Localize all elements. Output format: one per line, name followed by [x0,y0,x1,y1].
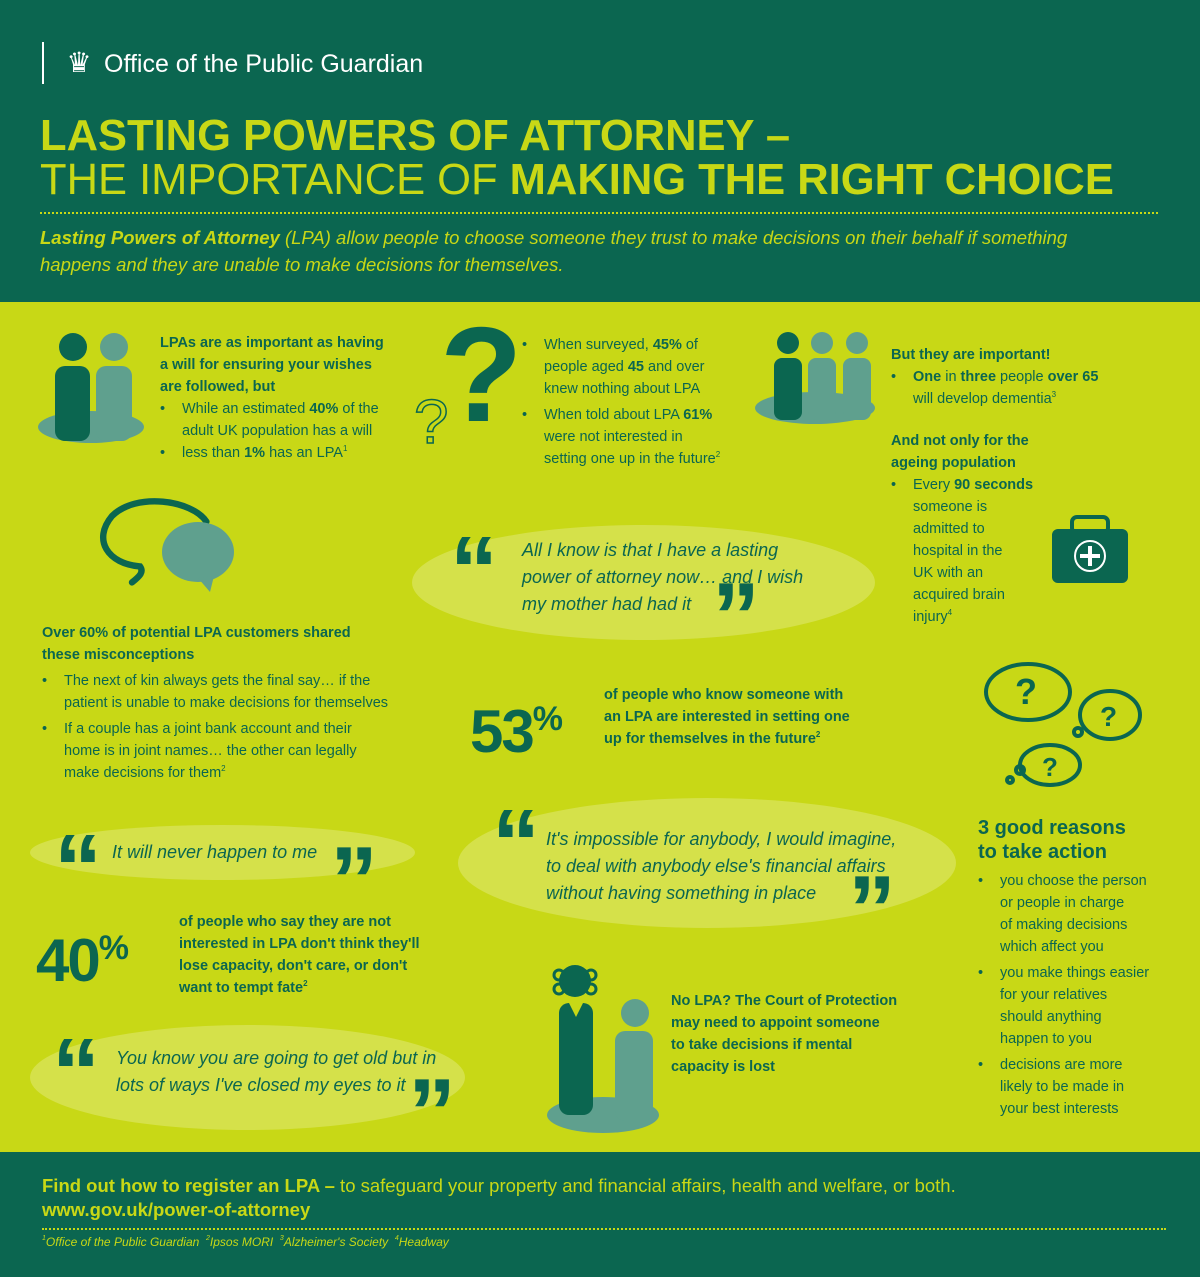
panel: misconceptions: make decisions for them2 [64,764,226,781]
icon: speech bubbles [100,498,234,592]
panel: 3 good reasons: happen to you [1000,1031,1092,1047]
intro text [40,227,1067,275]
panel: 3 good reasons: for your relatives [1000,987,1107,1003]
panel: LPA vs will: a will for ensuring your wishes [160,357,372,373]
panel: misconceptions: these misconceptions [42,647,194,663]
quote: mother: my mother had had it [522,594,691,614]
icon: two people [38,333,144,443]
quote: financial affairs: without having something in place [546,883,816,903]
stat: 53%: of people who know someone with [604,687,843,703]
title [40,112,1114,204]
footer [0,1152,1200,1277]
panel: LPA vs will: adult UK population has a will [182,423,372,439]
panel: dementia: One in three people over 65 [913,369,1098,385]
panel: 3 good reasons: or people in charge [1000,895,1124,911]
panel: LPA vs will: While an estimated 40% of the [182,401,379,417]
panel: dementia: Every 90 seconds [913,477,1033,493]
quote: get old: ” [408,1059,450,1166]
panel: Court of Protection: may need to appoint someone [671,1015,880,1031]
panel: survey: were not interested in [544,429,683,445]
panel: 3 good reasons: which affect you [1000,939,1104,955]
panel: survey: people aged 45 and over [544,359,704,375]
panel: survey: knew nothing about LPA [544,381,700,397]
panel: Court of Protection: No LPA? The Court of Protection [671,993,897,1009]
panel: 3 good reasons: should anything [1000,1009,1102,1025]
quote: mother [412,525,875,640]
panel: LPA vs will: are followed, but [160,379,275,395]
icon: judge and person [547,965,659,1133]
footnotes: 1Office of the Public Guardian 2Ipsos MORI 3Alzheimer's Society 4Headway [42,1235,449,1249]
quote: never happen: “ [54,815,96,922]
quote: never happen: It will never happen to me [112,842,317,862]
logo: ♛ [66,47,92,78]
panel: dementia: will develop dementia3 [913,390,1056,407]
quote: never happen [30,825,415,880]
panel: dementia: ageing population [891,455,1016,471]
quote: financial affairs: to deal with anybody else's financial affairs [546,856,886,876]
panel: survey: When told about LPA 61% [544,407,712,423]
panel: Court of Protection: to take decisions if mental [671,1037,852,1053]
panel: 3 good reasons: likely to be made in [1000,1079,1124,1095]
quote: financial affairs [458,798,956,928]
quote: mother: ” [712,563,754,670]
icon: thought bubbles [984,662,1142,787]
quote: get old: “ [52,1019,94,1126]
panel: 3 good reasons [978,817,1149,1117]
panel: LPA vs will: LPAs are as important as having [160,335,384,351]
quote: get old: lots of ways I've closed my eyes to it [116,1075,406,1095]
panel: misconceptions: home is in joint names… the other can legally [64,743,357,759]
panel: Court of Protection [671,993,897,1075]
stat: 40%: of people who say they are not [179,914,391,930]
title: LASTING POWERS OF ATTORNEY – [40,112,790,160]
quote: get old [30,1025,465,1130]
panel: dementia [891,347,1098,625]
stat: 40%: want to tempt fate2 [179,979,308,996]
quote: mother: All I know is that I have a lasting [522,540,778,560]
stat: 53%: an LPA are interested in setting one [604,709,850,725]
panel: 3 good reasons: decisions are more [1000,1057,1122,1073]
header [0,0,1200,302]
intro text: Lasting Powers of Attorney (LPA) allow people to choose someone they trust to make decisions on their behalf if something [40,227,1067,248]
panel: LPA vs will [160,335,384,461]
call to action: Find out how to register an LPA – to safeguard your property and financial affairs, health and welfare, or both. [42,1175,956,1196]
stat: 40%: lose capacity, don't care, or don't [179,958,407,974]
icon: thought bubbles: ? [1042,752,1058,782]
panel: misconceptions: Over 60% of potential LPA customers shared [42,625,351,641]
panel: misconceptions: The next of kin always gets the final say… if the [64,673,370,689]
panel: dementia: someone is [913,499,987,515]
logo [42,42,442,84]
intro text: happens and they are unable to make decisions for themselves. [40,254,563,275]
stat: 40%: 40% [36,927,127,994]
panel: 3 good reasons: of making decisions [1000,917,1127,933]
panel: Court of Protection: capacity is lost [671,1059,775,1075]
panel: dementia: But they are important! [891,347,1051,363]
panel: LPA vs will: less than 1% has an LPA1 [182,444,347,461]
title: THE IMPORTANCE OF MAKING THE RIGHT CHOICE [40,156,1114,204]
panel: dementia: injury4 [913,608,952,625]
panel: dementia: hospital in the [913,543,1002,559]
panel: 3 good reasons: 3 good reasons [978,817,1126,839]
icon: medical bag [1052,515,1128,583]
stat: 53% [470,687,850,765]
stat: 53%: 53% [470,698,561,765]
panel: dementia: admitted to [913,521,985,537]
quote: financial affairs: ” [848,856,890,963]
panel: misconceptions: patient is unable to make decisions for themselves [64,695,388,711]
quote: mother: “ [450,517,492,624]
panel: 3 good reasons: you choose the person [1000,873,1147,889]
stat: 40% [36,914,420,996]
panel: survey: setting one up in the future2 [544,450,720,467]
panel: dementia: And not only for the [891,433,1029,449]
quote: financial affairs: It's impossible for anybody, I would imagine, [546,829,896,849]
panel: 3 good reasons: you make things easier [1000,965,1149,981]
stat: 53%: up for themselves in the future2 [604,730,820,747]
panel: survey: When surveyed, 45% of [544,337,698,353]
panel: misconceptions: If a couple has a joint bank account and their [64,721,352,737]
call to action [42,1175,956,1220]
logo: Office of the Public Guardian [104,50,423,78]
panel: dementia: acquired brain [913,587,1005,603]
panel: dementia: UK with an [913,565,983,581]
quote: mother: power of attorney now… and I wish [522,567,803,587]
panel: 3 good reasons: your best interests [1000,1101,1118,1117]
panel: survey [522,337,720,467]
panel: 3 good reasons: to take action [978,841,1107,863]
stat: 40%: interested in LPA don't think they'll [179,936,420,952]
icon: thought bubbles: ? [1015,671,1037,712]
quote: get old: You know you are going to get old but in [116,1048,436,1068]
panel: misconceptions [42,625,388,781]
text: ” [330,827,372,934]
icon: three people [755,332,875,424]
call to action: www.gov.uk/power-of-attorney [42,1199,310,1220]
icon: thought bubbles: ? [1100,701,1117,732]
quote: financial affairs: “ [492,790,534,897]
